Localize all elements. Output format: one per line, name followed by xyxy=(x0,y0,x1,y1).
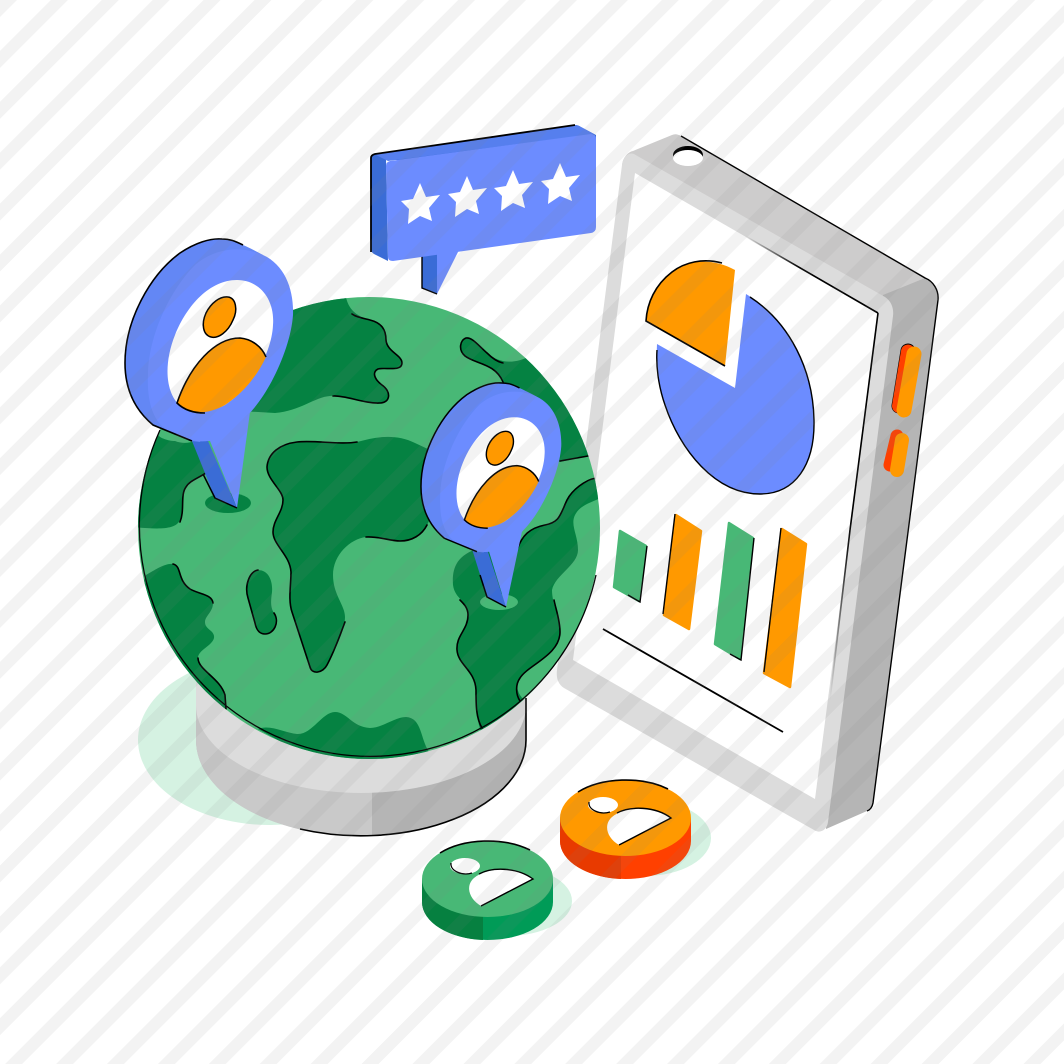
coin side right xyxy=(422,879,553,940)
globe stand xyxy=(196,660,526,836)
bar 3 xyxy=(715,523,753,659)
user body outline xyxy=(479,869,533,906)
ocean xyxy=(138,297,600,759)
pie orange slice xyxy=(646,262,735,366)
four white stars xyxy=(401,163,580,224)
person body outline xyxy=(464,466,539,528)
land north east xyxy=(461,338,588,462)
pie orange outline xyxy=(646,261,725,366)
phone screen xyxy=(573,173,878,799)
person body outline xyxy=(177,338,266,413)
orange user coin xyxy=(560,780,711,879)
bubble box xyxy=(371,125,596,261)
island xyxy=(247,570,276,634)
pie blue outline xyxy=(657,297,814,494)
globe xyxy=(138,297,600,759)
stand top ring xyxy=(196,660,526,793)
person body xyxy=(177,338,266,412)
phone front frame xyxy=(557,154,893,832)
bar 1 xyxy=(614,531,646,601)
user head outline xyxy=(451,863,472,874)
phone xyxy=(557,134,938,832)
map pin right xyxy=(421,383,561,607)
land south xyxy=(258,712,428,759)
person head xyxy=(486,431,513,465)
user head outline xyxy=(589,802,610,813)
stand outline xyxy=(300,698,526,836)
land south west xyxy=(144,564,226,710)
pin portrait window xyxy=(456,417,545,527)
land north xyxy=(251,298,402,413)
pin head front xyxy=(440,392,561,552)
continents xyxy=(138,298,598,759)
coin top outline xyxy=(440,841,530,853)
coin side right xyxy=(560,818,691,879)
pin tip side xyxy=(192,441,237,508)
map pin left xyxy=(125,239,293,508)
bar outlines xyxy=(628,514,781,672)
pin 1 location marker xyxy=(205,493,251,513)
green user coin xyxy=(422,841,572,940)
stand side right xyxy=(196,660,526,836)
coin side left xyxy=(422,879,483,940)
coin side left xyxy=(560,818,621,879)
ground shadow of globe xyxy=(138,655,402,825)
pin 2 location marker xyxy=(480,594,518,610)
user head xyxy=(450,858,480,874)
bar chart xyxy=(603,514,806,732)
small side button xyxy=(890,436,902,470)
stand side left xyxy=(196,660,372,836)
pin head front xyxy=(148,249,293,441)
pin portrait window xyxy=(168,280,273,412)
camera hole xyxy=(673,146,703,166)
phone edges xyxy=(681,136,938,811)
coin shadow xyxy=(579,800,711,876)
pie blue slice xyxy=(657,294,814,494)
globe outline xyxy=(139,430,596,756)
pin tip outline xyxy=(480,575,506,607)
pin head xyxy=(421,383,561,552)
land west xyxy=(138,436,205,528)
person head xyxy=(203,297,236,337)
bar 4 xyxy=(764,529,806,687)
user body outline xyxy=(617,808,671,845)
user head xyxy=(588,797,618,813)
user body xyxy=(469,870,533,906)
pin head side xyxy=(421,383,536,552)
coin top xyxy=(422,841,553,917)
pin tip side xyxy=(472,549,506,607)
bar 2 xyxy=(664,515,701,629)
pin head outline xyxy=(421,383,520,552)
large side button xyxy=(899,351,914,410)
coastlines xyxy=(173,314,596,728)
bubble tail xyxy=(422,248,460,294)
pin tip front xyxy=(208,412,250,508)
chart axis xyxy=(603,629,783,732)
pin tip front xyxy=(487,522,524,607)
user body xyxy=(607,808,671,845)
coin top outline xyxy=(578,780,668,792)
pin head outline xyxy=(125,239,243,441)
phone top face xyxy=(622,134,927,320)
land east xyxy=(453,476,605,735)
coin shadow xyxy=(442,866,572,936)
land center xyxy=(267,437,440,672)
phone right face xyxy=(826,278,938,829)
coin top xyxy=(560,780,691,856)
pie chart xyxy=(646,261,814,494)
person body xyxy=(464,466,539,528)
speech bubble with star rating xyxy=(371,125,596,294)
pin head side xyxy=(125,239,263,442)
pin tip outline xyxy=(203,474,237,508)
coin body xyxy=(422,841,553,940)
